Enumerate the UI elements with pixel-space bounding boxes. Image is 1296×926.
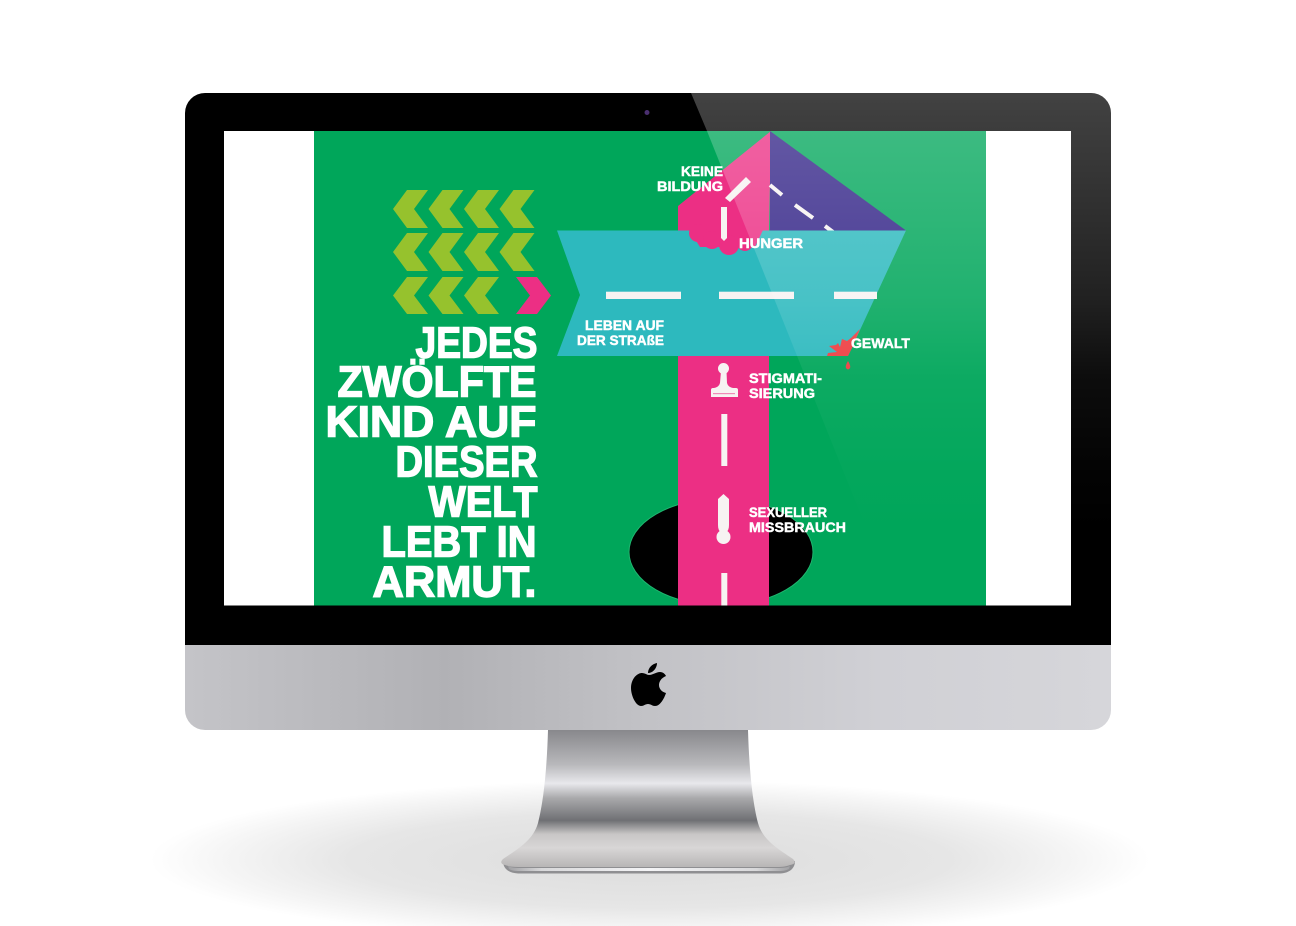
heading: WELT (428, 478, 538, 526)
icon: webcam (644, 110, 650, 115)
glass reflection on the green panel (707, 131, 986, 606)
chevrons: left pointing (393, 190, 534, 314)
background (314, 131, 986, 606)
chevron: pink right pointing (516, 277, 551, 314)
label: hunger: HUNGER (739, 235, 803, 251)
label: keine bildung: BILDUNG (657, 178, 723, 194)
label: leben auf der strasse (578, 320, 664, 346)
label: stigmatisierung: STIGMATI- (749, 370, 822, 386)
panel: infographic (314, 131, 986, 606)
icon: hunger cloud (689, 230, 763, 255)
label: stigmatisierung: SIERUNG (749, 385, 815, 401)
glass reflection on the bezel (691, 93, 1111, 418)
label: sexueller missbrauch (749, 507, 846, 532)
teal road (557, 230, 906, 356)
icon: blood splatter (827, 329, 860, 370)
heading: DIESER (396, 438, 538, 486)
heading: ARMUT. (372, 558, 536, 606)
monitor chin (185, 645, 1111, 730)
icon: condom (716, 494, 730, 544)
heading: ZWÖLFTE (338, 358, 536, 406)
label: stigmatisierung (749, 373, 822, 398)
black hole (629, 498, 813, 606)
label: leben auf der strasse: LEBEN AUF (585, 317, 664, 333)
road dashes: top (721, 177, 751, 241)
purple road (770, 131, 906, 232)
road dash: bottom (721, 573, 727, 606)
monitor stand (501, 730, 795, 876)
icon: apple logo (631, 663, 666, 706)
label: leben auf der strasse: DER STRAßE (577, 332, 664, 348)
heading: JEDES (416, 318, 538, 368)
heading: LEBT IN (382, 518, 536, 566)
heading (326, 318, 538, 606)
label: keine bildung: KEINE (681, 163, 723, 179)
label: sexueller missbrauch: MISSBRAUCH (749, 519, 846, 535)
white screen (224, 131, 1071, 606)
floor shadow (150, 780, 1150, 926)
label: keine bildung (658, 166, 723, 192)
monitor bezel (185, 93, 1111, 645)
label: sexueller missbrauch: SEXUELLER (749, 504, 827, 520)
label: gewalt: GEWALT (851, 335, 910, 351)
illustration: iMac mockup with infographic (185, 93, 1111, 926)
pink road (678, 131, 771, 606)
icon: stamp (711, 363, 738, 397)
heading: KIND AUF (326, 398, 536, 446)
road dash: middle (721, 414, 727, 466)
